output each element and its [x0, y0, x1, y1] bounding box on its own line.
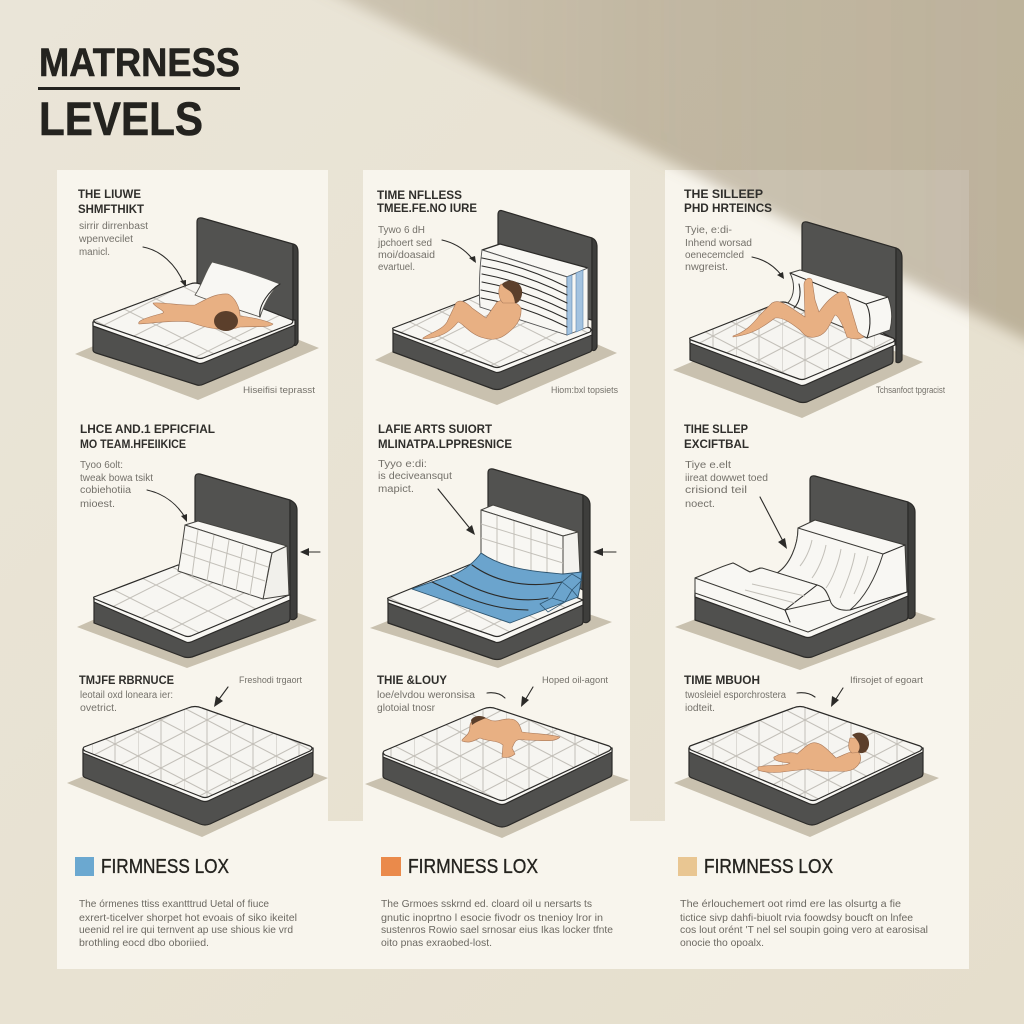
text block: LHCE AND.1 EPFICFIAL	[80, 422, 215, 436]
text block: mapict.	[378, 484, 414, 495]
swatch: blue	[75, 857, 94, 876]
arrow: right side	[300, 548, 320, 556]
legend heading: FIRMNESS LOX	[704, 856, 833, 878]
text block: Tyie, e:di-	[685, 225, 732, 236]
text block: jpchoert sed	[377, 238, 432, 249]
legend text: tictice sivp dahfi-biuolt rvia foowdsy boucft on lnfee	[680, 912, 913, 924]
legend: blue firmness	[75, 856, 297, 949]
text block: tweak bowa tsikt	[80, 473, 153, 484]
arrow	[214, 687, 228, 707]
illustration: bed with raised quilted section	[77, 474, 317, 668]
text block: THE SILLEEP	[684, 187, 763, 201]
text block: TIME MBUOH	[684, 673, 760, 687]
title: MATRNESS	[39, 41, 240, 85]
text block: sirrir dirrenbast	[79, 221, 148, 232]
arrow	[521, 687, 533, 707]
legend text: The érlouchemert oot rimd ere las olsurtg a fie	[680, 898, 901, 910]
arrow	[143, 247, 186, 287]
text block	[684, 673, 786, 714]
legend heading: FIRMNESS LOX	[408, 856, 538, 878]
arrow	[831, 688, 843, 707]
legend: orange firmness	[381, 856, 613, 949]
text block: manicl.	[79, 247, 110, 258]
legend text: oito pnas exraobed-lost.	[381, 937, 492, 949]
arrow: small curve	[797, 693, 815, 697]
panel: bed 4	[77, 422, 320, 668]
text block: oenecemcled	[685, 250, 744, 261]
arrow: diagonal	[438, 489, 475, 535]
title: LEVELS	[39, 92, 203, 145]
text block	[80, 422, 215, 510]
caption: Hiseifisi teprasst	[243, 385, 316, 395]
text block: TMJFE RBRNUCE	[79, 673, 174, 687]
diagonal sun shadow	[306, 0, 1024, 352]
legend text: gnutic inoprtno l esocie fivodr os tnenioy lror in	[381, 912, 603, 924]
text block: glotoial tnosr	[377, 703, 436, 714]
text block: THE LIUWE	[78, 187, 141, 201]
text block	[377, 188, 477, 273]
text block: TMEE.FE.NO IURE	[377, 201, 477, 215]
legend text: exrert-ticelver shorpet hot evoais of siko ikeitel	[79, 912, 297, 924]
arrow	[752, 257, 784, 279]
illustration: bed with pillow and person	[75, 218, 319, 400]
illustration: bed with blue support layer	[370, 469, 612, 668]
legend text: The órmenes ttiss exantttrud Uetal of fiuce	[79, 898, 269, 910]
caption: Hiom:bxl topsiets	[551, 385, 618, 395]
legend text	[381, 898, 613, 949]
title	[38, 41, 240, 145]
caption: Ifirsojet of egoart	[850, 675, 924, 685]
text block	[684, 422, 768, 510]
legend text: ueenid rel ire qui ternvent ap use shious kie vrd	[79, 924, 293, 936]
illustration: bed with layered back stack and person	[375, 210, 617, 405]
text block: leotail oxd loneara ier:	[80, 690, 173, 701]
text block: PHD HRTEINCS	[684, 201, 772, 215]
text block: Tiye e.elt	[685, 460, 731, 471]
arrow: right side	[593, 548, 616, 556]
arrow: diagonal	[760, 497, 787, 549]
text block	[684, 187, 772, 273]
text block: twosleiel esporchrostera	[685, 690, 786, 701]
text block: moi/doasaid	[378, 250, 435, 261]
caption: Tchsanfoct tpgracist	[876, 385, 945, 395]
text block: iireat dowwet toed	[685, 473, 768, 484]
panel: bed 6	[675, 422, 936, 670]
cream panel sheet with gutters	[57, 170, 969, 969]
text block: nwgreist.	[685, 262, 728, 273]
text block: cobiehotiia	[80, 485, 131, 496]
caption: Freshodi trgaort	[239, 675, 302, 685]
panel: bed 3	[673, 187, 945, 418]
legend text: sustenros Rowio sael srnosar eius Ikas locker tfnte	[381, 924, 613, 936]
illustration: bed with contoured foam	[675, 476, 936, 670]
text block: LAFIE ARTS SUIORT	[378, 422, 493, 436]
arrow: curved	[147, 490, 187, 522]
panel: bed 5	[370, 422, 616, 668]
text block	[79, 673, 174, 714]
legend text	[680, 898, 928, 949]
illustration: bed with wedge pillow and person	[673, 222, 923, 418]
text block	[78, 187, 148, 258]
swatch: tan	[678, 857, 697, 876]
panel: bed 2	[375, 188, 618, 405]
text block: crisiond teil	[685, 485, 747, 496]
legend: tan firmness	[678, 856, 928, 949]
text block: ovetrict.	[80, 703, 117, 714]
text block: THIE &LOUY	[377, 673, 447, 687]
text block: Inhend worsad	[685, 238, 752, 249]
text block: Tyoo 6olt:	[80, 460, 123, 471]
illustration: mattress with person	[674, 706, 939, 837]
text block: MO TEAM.HFEIIKICE	[80, 437, 186, 451]
legend text: onocie tho opoalx.	[680, 937, 764, 949]
panel: bed 9	[674, 673, 939, 837]
illustration: flat mattress	[67, 706, 328, 837]
text block: noect.	[685, 499, 715, 510]
illustration: mattress with person	[365, 708, 629, 838]
legend heading: FIRMNESS LOX	[101, 856, 229, 878]
legend text: cos lout orént 'T nel sel soupin going vero at earosisal	[680, 924, 928, 936]
legend text: The Grmoes sskrnd ed. cloard oil u nersarts ts	[381, 898, 592, 910]
text block: evartuel.	[378, 262, 415, 273]
text block: SHMFTHIKT	[78, 202, 145, 216]
legend text	[79, 898, 297, 949]
panel: bed 8	[365, 673, 629, 838]
legend text: brothling eocd dbo oboriied.	[79, 937, 209, 949]
caption: Hoped oil-agont	[542, 675, 609, 685]
text block: mioest.	[80, 499, 115, 510]
panel: bed 1	[75, 187, 319, 400]
text block: EXCIFTBAL	[684, 437, 749, 451]
text block: iodteit.	[685, 703, 715, 714]
text block: loe/elvdou weronsisa	[377, 690, 475, 701]
text block: Tyyo e:di:	[378, 459, 427, 470]
text block: TIME NFLLESS	[377, 188, 462, 202]
text block: Tywo 6 dH	[378, 225, 425, 236]
text block	[377, 673, 475, 714]
panel: bed 7	[67, 673, 328, 837]
arrow: small curve	[487, 693, 505, 698]
text block: is deciveansqut	[378, 471, 452, 482]
text block: MLINATPA.LPPRESNICE	[378, 437, 512, 451]
text block	[378, 422, 512, 495]
text block: TIHE SLLEP	[684, 422, 748, 436]
swatch: orange	[381, 857, 401, 876]
text block: wpenvecilet	[78, 234, 133, 245]
arrow	[442, 240, 476, 263]
